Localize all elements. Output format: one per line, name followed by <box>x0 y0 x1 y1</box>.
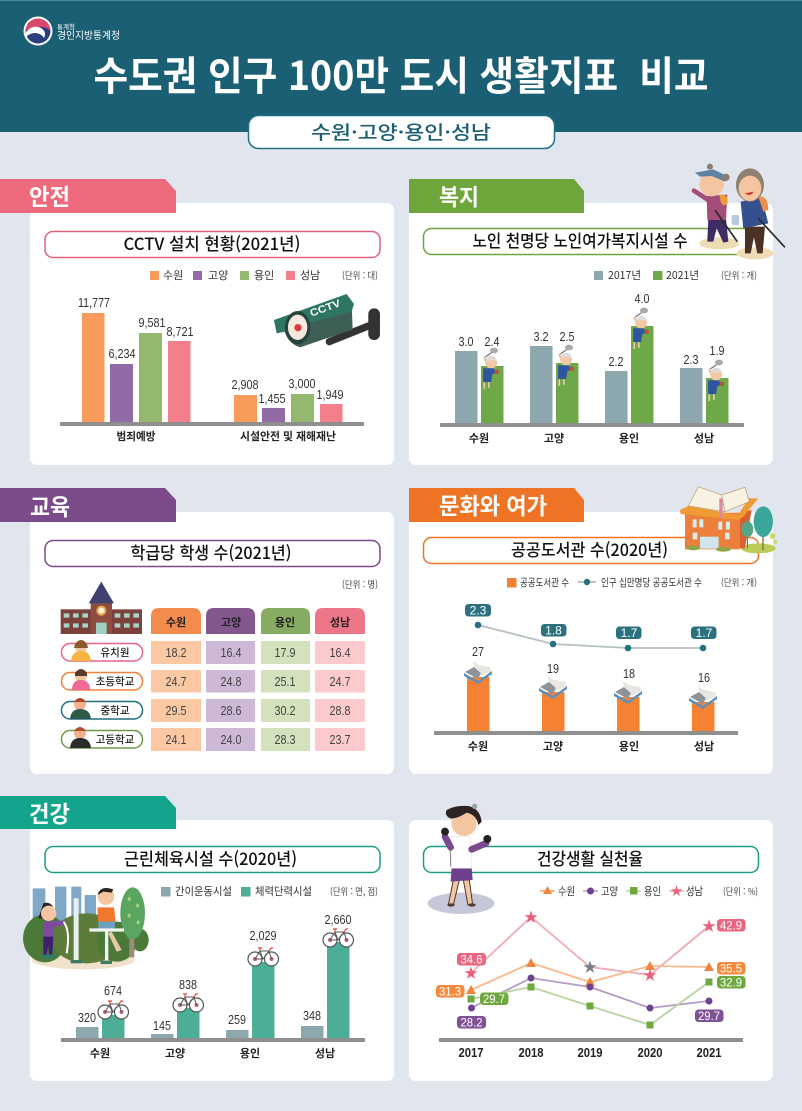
legend <box>150 267 378 283</box>
icon: grandma 2 <box>558 345 574 386</box>
line chart: healthy living: 28.2 <box>460 1016 483 1030</box>
bar chart: senior facilities: 수원 <box>469 430 489 446</box>
logo <box>24 16 120 46</box>
line chart: healthy living: ★ <box>583 959 597 975</box>
section tag: welfare: 복지 <box>439 178 479 212</box>
bar chart: senior facilities: 2.3 <box>684 353 699 367</box>
line chart: libraries per 100k: 1.7 <box>696 626 713 640</box>
panel: health facilities <box>0 795 394 1081</box>
bar chart: CCTV <box>60 296 364 444</box>
bar chart: senior facilities: 3.0 <box>458 335 474 349</box>
bar chart: CCTV: 1,949 <box>316 388 344 402</box>
bar chart: CCTV: 6,234 <box>108 347 136 361</box>
heading: CCTV: CCTV 설치 현황(2021년) <box>124 230 300 255</box>
row: kindergarten: 16.4 <box>220 646 242 660</box>
icon: grandma 3 <box>633 308 649 349</box>
icon: bicycle 1 <box>98 1001 128 1019</box>
icon: book 1 <box>464 661 492 684</box>
bar chart: fitness facilities <box>61 913 365 1061</box>
panel: safety <box>0 178 394 465</box>
legend: (단위 : 대) <box>342 268 378 282</box>
row: high school: 23.7 <box>330 733 351 747</box>
line chart: libraries per 100k: 1.8 <box>545 624 562 638</box>
bar chart: libraries: 19 <box>547 662 559 676</box>
legend: (단위 : %) <box>723 884 758 898</box>
line chart: healthy living: 2018 <box>518 1046 544 1060</box>
section tag: education <box>0 488 176 522</box>
column headers: 고양 <box>221 614 241 630</box>
line chart: healthy living: 32.9 <box>720 976 742 990</box>
icon: seniors hiking <box>694 164 785 259</box>
row: high school: 24.0 <box>220 733 242 747</box>
line chart: healthy living: 2021 <box>696 1046 722 1060</box>
legend: 수원 <box>163 267 183 283</box>
bar chart: CCTV: 2,908 <box>232 378 259 392</box>
line chart: healthy living: 34.6 <box>460 952 483 966</box>
line chart: healthy living: ★ <box>702 918 716 934</box>
line chart: healthy living <box>436 909 746 1060</box>
icon: CCTV camera <box>274 294 380 347</box>
row: elementary: 초등학교 <box>96 674 135 689</box>
bar chart: fitness facilities: 성남 <box>315 1045 335 1061</box>
icon: bicycle 3 <box>248 948 278 966</box>
bar chart: libraries: 27 <box>472 645 484 659</box>
row: kindergarten: 18.2 <box>166 646 187 660</box>
bar chart: libraries: 성남 <box>694 738 714 754</box>
section tag: culture <box>409 487 584 522</box>
line chart: healthy living: 29.7 <box>698 1009 720 1023</box>
row: kindergarten: 유치원 <box>101 645 129 660</box>
row: kindergarten: 16.4 <box>330 646 351 660</box>
line chart: libraries per 100k: 2.3 <box>470 604 487 618</box>
bar chart: libraries: 고양 <box>543 738 563 754</box>
bar chart: libraries: 18 <box>623 667 635 681</box>
bar chart: fitness facilities: 348 <box>303 1009 321 1023</box>
panel: education <box>0 488 394 774</box>
legend <box>507 575 757 590</box>
legend: 2017년 <box>608 267 641 283</box>
legend: (단위 : 면, 점) <box>330 884 378 898</box>
icon: library building <box>680 487 777 553</box>
row: high school <box>62 727 365 751</box>
line chart: healthy living: ★ <box>524 909 538 925</box>
row: kindergarten: 17.9 <box>274 646 296 660</box>
legend: 고양 <box>601 883 618 899</box>
bar chart: CCTV: 9,581 <box>138 316 166 330</box>
bar chart: CCTV: 1,455 <box>258 392 286 406</box>
row: kindergarten <box>62 640 365 664</box>
panel: welfare <box>409 164 785 465</box>
subtitle pill <box>248 116 554 148</box>
heading: fitness facilities: 근린체육시설 수(2020년) <box>124 845 297 870</box>
bar chart: fitness facilities: 145 <box>153 1019 171 1033</box>
line chart: healthy living: 29.7 <box>483 992 505 1006</box>
bar chart: senior facilities: 3.2 <box>534 330 549 344</box>
column headers: 성남 <box>330 614 350 630</box>
bar chart: fitness facilities: 674 <box>104 984 122 998</box>
heading: senior facilities <box>424 227 758 254</box>
section tag: health: 건강 <box>29 795 70 829</box>
icon: book 3 <box>614 681 642 704</box>
row: high school: 고등학교 <box>96 732 135 747</box>
line chart: healthy living: ★ <box>643 967 657 983</box>
heading: CCTV <box>45 230 380 258</box>
section tag: welfare <box>409 178 584 213</box>
column headers: 용인 <box>275 614 295 630</box>
bar chart: senior facilities: 2.4 <box>484 335 500 349</box>
logo: 경인지방통계청 <box>57 27 120 42</box>
heading: fitness facilities <box>45 845 380 872</box>
column headers <box>151 608 365 634</box>
icon: bicycle 4 <box>323 929 354 947</box>
legend: 성남 <box>300 267 320 283</box>
line chart: healthy living: 31.3 <box>439 984 461 998</box>
bar chart: fitness facilities: 2,029 <box>250 929 277 943</box>
legend: 공공도서관 수 <box>520 575 569 590</box>
line chart: healthy living: 2020 <box>638 1046 663 1060</box>
row: high school: 24.1 <box>166 733 187 747</box>
bar chart: senior facilities: 용인 <box>619 430 639 446</box>
icon: grandma 4 <box>708 360 724 401</box>
row: middle school: 30.2 <box>274 704 296 718</box>
line chart: healthy living: 2019 <box>578 1046 603 1060</box>
icon: bicycle 2 <box>173 994 204 1012</box>
bar chart: senior facilities: 2.2 <box>608 355 624 369</box>
row: middle school <box>62 698 365 722</box>
section tag: culture: 문화와 여가 <box>439 487 547 521</box>
legend: 수원 <box>558 883 575 899</box>
bar chart: CCTV: 8,721 <box>166 325 194 339</box>
icon: book 4 <box>689 686 717 709</box>
legend: 체력단력시설 <box>255 883 312 899</box>
row: elementary: 24.7 <box>166 675 187 689</box>
row: elementary <box>62 669 365 692</box>
legend <box>161 883 378 899</box>
title: 수도권 인구 100만 도시 생활지표 비교 <box>94 44 708 102</box>
logo: 통계청 <box>57 21 75 31</box>
icon: grandma 1 <box>483 348 499 389</box>
bar chart: CCTV: 3,000 <box>288 377 316 391</box>
legend: 간이운동시설 <box>175 883 232 899</box>
unit label: (단위 : 명) <box>342 577 378 591</box>
bar chart: CCTV: 범죄예방 <box>116 428 156 444</box>
row: elementary: 24.7 <box>330 675 351 689</box>
row: middle school: 28.8 <box>330 704 351 718</box>
row: middle school: 29.5 <box>166 704 187 718</box>
bar chart: fitness facilities: 수원 <box>90 1045 110 1061</box>
heading: healthy living rate <box>424 845 758 872</box>
line chart: healthy living: 42.9 <box>720 918 742 932</box>
heading: students per class <box>45 539 380 566</box>
bar chart: libraries: 수원 <box>468 738 488 754</box>
heading: libraries: 공공도서관 수(2020년) <box>511 536 668 561</box>
bar chart: CCTV: 시설안전 및 재해재난 <box>240 428 336 444</box>
column headers: 수원 <box>166 614 186 630</box>
bar chart: fitness facilities: 2,660 <box>324 913 352 927</box>
row: elementary: 24.8 <box>220 675 242 689</box>
section tag: education: 교육 <box>30 488 70 522</box>
legend: (단위 : 개) <box>721 575 757 589</box>
legend: (단위 : 개) <box>721 268 757 282</box>
legend: 고양 <box>208 267 228 283</box>
table: students per class <box>62 608 365 751</box>
bar chart: senior facilities <box>440 292 744 446</box>
panel: healthy living <box>409 804 773 1081</box>
heading: healthy living rate: 건강생활 실천율 <box>537 845 643 870</box>
section tag: safety <box>0 178 176 213</box>
legend: 인구 십만명당 공공도서관 수 <box>601 575 702 590</box>
bar chart: senior facilities: 2.5 <box>560 330 575 344</box>
subtitle pill: 수원·고양·용인·성남 <box>311 118 491 145</box>
illustration: park exercise <box>23 887 149 969</box>
section tag: safety: 안전 <box>29 178 70 212</box>
bar chart: fitness facilities: 259 <box>228 1013 246 1027</box>
header banner <box>0 0 802 148</box>
bar chart: fitness facilities: 838 <box>179 978 197 992</box>
legend: 2021년 <box>666 267 699 283</box>
bar chart: fitness facilities: 고양 <box>165 1045 185 1061</box>
line chart: healthy living: ★ <box>464 965 478 981</box>
icon: school building <box>61 582 142 634</box>
line chart: healthy living: 2017 <box>458 1046 484 1060</box>
icon: book 2 <box>539 676 567 699</box>
bar chart: senior facilities: 1.9 <box>710 344 725 358</box>
bar chart: senior facilities: 고양 <box>544 430 564 446</box>
row: high school: 28.3 <box>274 733 296 747</box>
row: elementary: 25.1 <box>274 675 296 689</box>
panel: culture <box>409 487 777 774</box>
line chart: libraries per 100k <box>465 604 716 651</box>
heading: senior facilities: 노인 천명당 노인여가복지시설 수 <box>472 227 688 252</box>
bar chart: libraries: 16 <box>698 671 710 685</box>
legend <box>540 883 758 899</box>
line chart: libraries per 100k: 1.7 <box>621 626 638 640</box>
illustration: woman with dumbbells <box>428 804 494 914</box>
section tag: health <box>0 795 176 829</box>
icon: CCTV camera: CCTV <box>309 298 342 320</box>
bar chart: fitness facilities: 용인 <box>240 1045 260 1061</box>
row: middle school: 중학교 <box>101 703 130 718</box>
line chart: healthy living: 35.5 <box>720 962 742 976</box>
legend: 성남 <box>686 883 703 899</box>
heading: libraries <box>424 536 758 564</box>
bar chart: libraries <box>434 645 738 754</box>
bar chart: senior facilities: 성남 <box>694 430 714 446</box>
bar chart: CCTV: 11,777 <box>78 296 110 310</box>
row: middle school: 28.6 <box>220 704 242 718</box>
heading: students per class: 학급당 학생 수(2021년) <box>130 539 292 564</box>
bar chart: fitness facilities: 320 <box>78 1011 96 1025</box>
legend: 용인 <box>644 883 661 899</box>
legend: ★ <box>670 884 683 898</box>
legend <box>594 267 757 283</box>
bar chart: libraries: 용인 <box>619 738 639 754</box>
legend: 용인 <box>254 267 274 283</box>
bar chart: senior facilities: 4.0 <box>634 292 650 306</box>
